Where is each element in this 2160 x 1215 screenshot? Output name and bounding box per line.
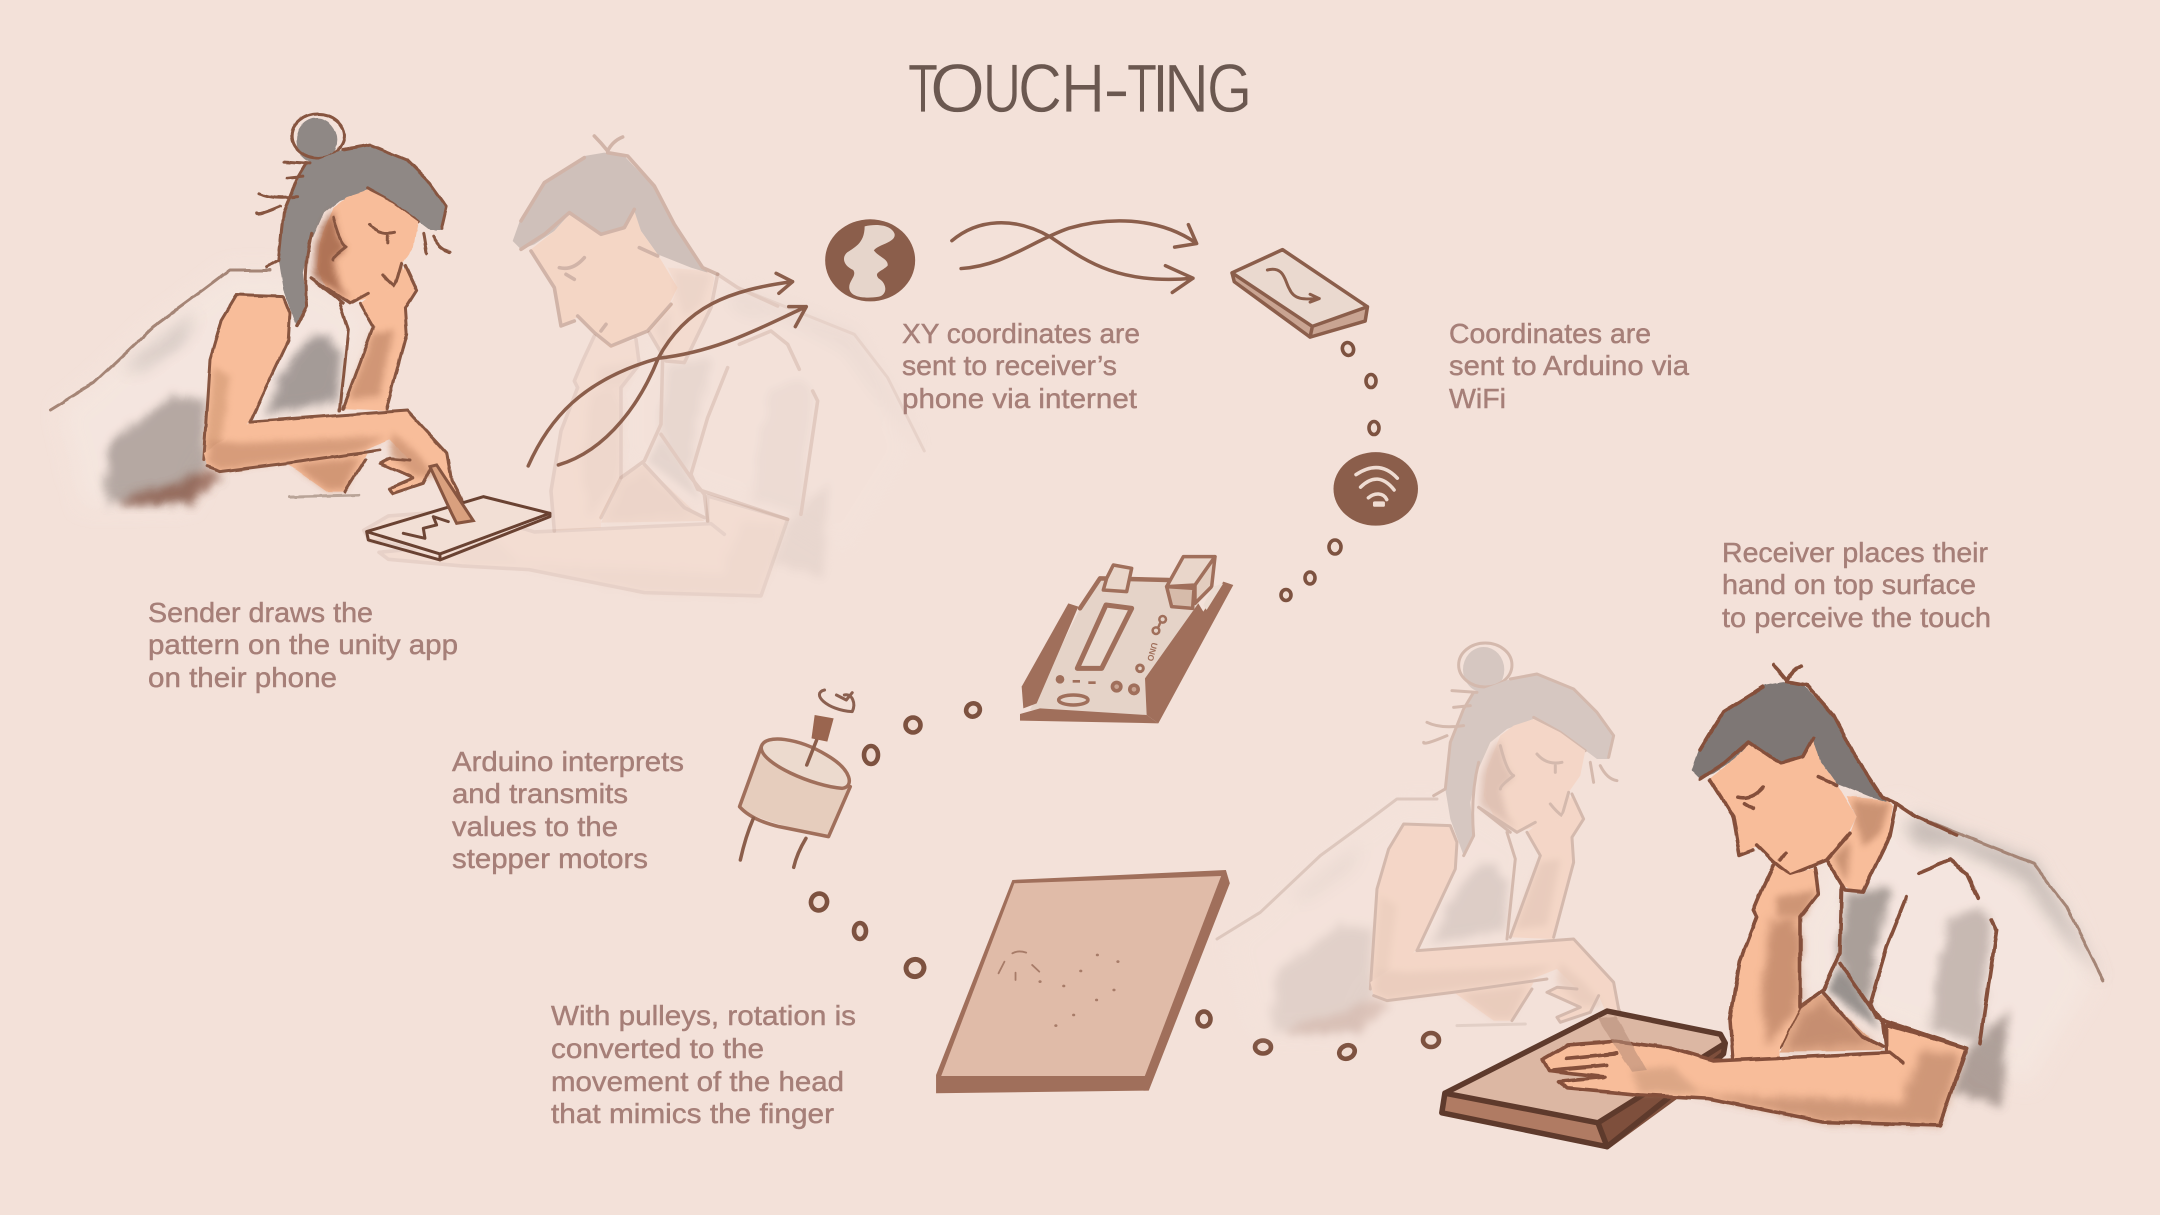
text: sender step: Sender draws the — [148, 597, 373, 628]
text: receiver step: Receiver places their — [1722, 537, 1988, 568]
illustration: receiver man — [1543, 665, 2103, 1125]
title: C — [1018, 50, 1062, 127]
icon: arduino board — [1020, 557, 1233, 723]
text: sender step — [148, 597, 458, 693]
title: O — [930, 50, 985, 127]
text: sender step: pattern on the unity app — [148, 629, 458, 660]
ghost figure: faded sender behind receiver — [1217, 643, 1640, 1051]
text: pulley step: With pulleys, rotation is — [551, 1000, 856, 1031]
text: internet step — [902, 318, 1140, 414]
icon: globe — [825, 219, 915, 301]
title: T — [1127, 50, 1157, 127]
ghost figure: faded receiver behind sender — [364, 136, 924, 596]
text: receiver step — [1722, 537, 1991, 633]
text: arduino step: stepper motors — [452, 843, 648, 874]
text: arduino step: and transmits — [452, 778, 628, 809]
title: H — [1061, 50, 1105, 127]
icon: pin display panel — [936, 870, 1230, 1093]
text: sender step: on their phone — [148, 662, 337, 693]
text: wifi step: Coordinates are — [1449, 318, 1651, 349]
text: receiver step: to perceive the touch — [1722, 602, 1991, 633]
arrows: internet to receiver phone — [952, 221, 1197, 292]
text: arduino step — [452, 746, 684, 874]
text: pulley step — [551, 1000, 856, 1129]
text: wifi step — [1449, 318, 1690, 414]
text: internet step: phone via internet — [902, 383, 1137, 414]
text: arduino step: values to the — [452, 811, 618, 842]
title: I — [1152, 50, 1169, 127]
text: wifi step: sent to Arduino via — [1449, 350, 1690, 381]
icon: stepper motor — [740, 690, 854, 867]
title: T — [908, 50, 938, 127]
text: pulley step: converted to the — [551, 1033, 764, 1064]
title: N — [1164, 50, 1209, 127]
text: arduino step: Arduino interprets — [452, 746, 684, 777]
icon: wifi — [1333, 452, 1418, 526]
text: receiver step: hand on top surface — [1722, 569, 1976, 600]
title: U — [983, 50, 1021, 127]
illustration: sender woman — [50, 114, 473, 522]
label: UNO on board: UNO — [1145, 641, 1160, 663]
title: - — [1103, 50, 1130, 127]
connector dots — [809, 341, 1439, 1061]
text: wifi step: WiFi — [1449, 383, 1506, 414]
text: internet step: sent to receiver’s — [902, 350, 1117, 381]
title: G — [1207, 50, 1252, 127]
text: internet step: XY coordinates are — [902, 318, 1140, 349]
icon: touch box — [1442, 1011, 1726, 1148]
text: pulley step: that mimics the finger — [551, 1098, 834, 1129]
icon: receiver phone — [1232, 250, 1367, 337]
icon: sender phone with finger — [367, 465, 550, 560]
arrows: sender to internet — [528, 273, 806, 466]
text: pulley step: movement of the head — [551, 1066, 844, 1097]
